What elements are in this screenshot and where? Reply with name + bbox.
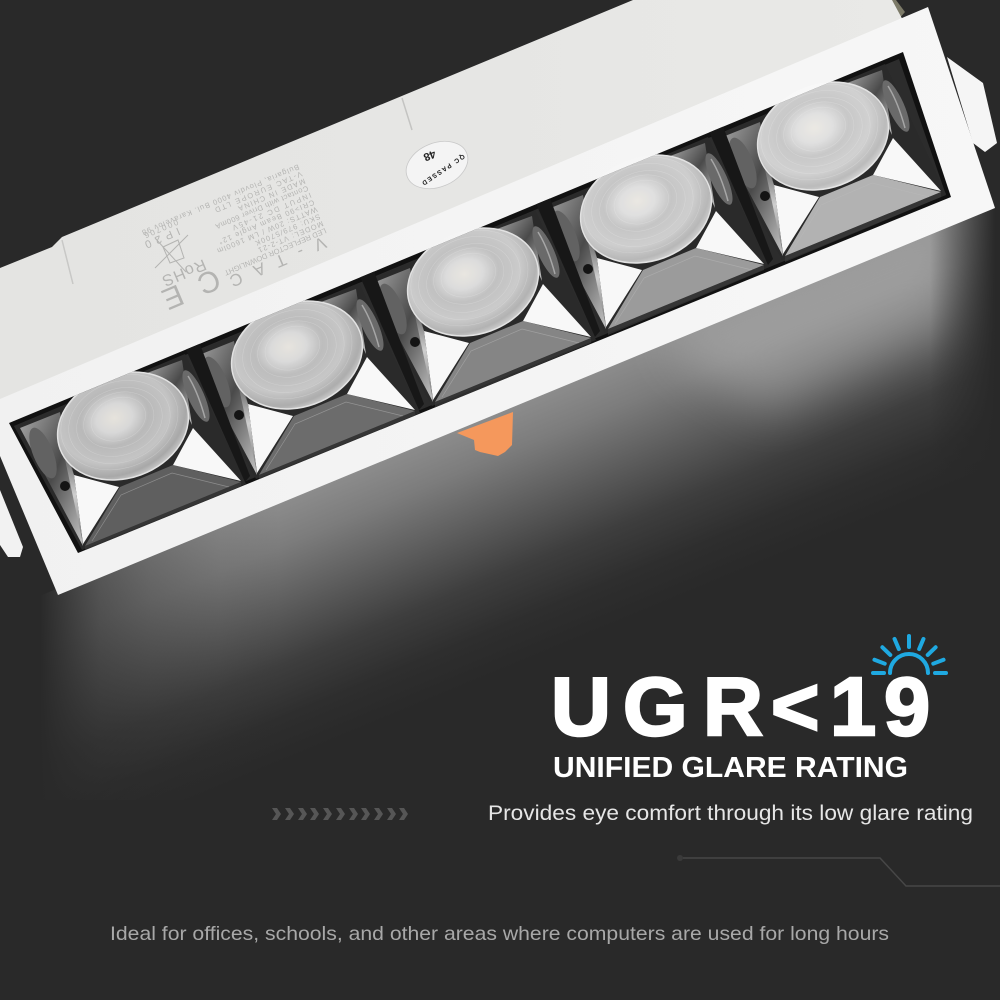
QC sticker: 48: [422, 147, 437, 163]
printed product label: MODEL: VT-2-21: [257, 219, 325, 255]
recessed reflector opening: [9, 52, 951, 553]
printed product label: MADE IN CHINA: [237, 177, 307, 213]
orange connector clip: [457, 412, 513, 456]
icon: blue sun glare: [873, 636, 946, 673]
heading: UGR<19: UGR<19: [551, 660, 930, 753]
printed product label: Bulgaria, Plovdiv 4000 Bul. Karavelov 98: [141, 162, 301, 237]
left mounting clip: [0, 490, 23, 557]
light glow under the fixture: [0, 180, 1000, 800]
cell dividers: [184, 121, 773, 482]
subheading: unified glare rating: UNIFIED GLARE RATING: [553, 752, 908, 784]
icon: crossed-out bin mark: [155, 235, 188, 272]
headline block: [488, 636, 973, 825]
printed product label: INPUT DC 21-45V: [231, 191, 313, 232]
printed product label: LED REFLECTOR DOWNLIGHT: [223, 226, 328, 278]
footer text: Ideal for offices, schools, and other areas where computers are used for long hours: [110, 923, 889, 945]
printed product label: CRI>90 Beam Angle 12°: [217, 198, 316, 246]
rear olive connector: [885, 0, 905, 20]
decorative chevrons: [272, 808, 408, 820]
reflector cell 1: [14, 354, 246, 552]
reflector cell 3: [364, 210, 596, 408]
right mounting clip: [947, 57, 997, 152]
reflector cell 2: [204, 289, 420, 480]
printed product label: SKU: 979/5700K: [254, 212, 322, 248]
fixture: LED downlight: [0, 0, 997, 595]
QC sticker: [399, 133, 475, 197]
white trim frame: [0, 7, 995, 595]
printed product label: V-TAC EUROPE LTD: [213, 169, 304, 215]
QC sticker: QC PASSED: [420, 152, 466, 186]
printed product label: [134, 162, 334, 317]
reflector cells: [14, 59, 946, 552]
lens brightening: [217, 65, 903, 426]
description: Provides eye comfort through its low glare rating: [488, 802, 973, 825]
printed product label: RoHS: [160, 255, 209, 289]
printed product label: CE: [157, 262, 225, 316]
housing body: [0, 0, 905, 402]
printed product label: Contact with Driver 600mA: [214, 184, 310, 231]
reflector cell 5: [714, 64, 946, 262]
printed product label: WATTS: 20W / LM 1600lm: [216, 205, 319, 255]
printed product label: V-TAC: [227, 233, 329, 290]
reflector cell 4: [537, 137, 769, 335]
printed product label: IP20: [143, 225, 182, 250]
printed product label: 000706: [142, 217, 180, 240]
circuit line accent: [677, 855, 1000, 886]
